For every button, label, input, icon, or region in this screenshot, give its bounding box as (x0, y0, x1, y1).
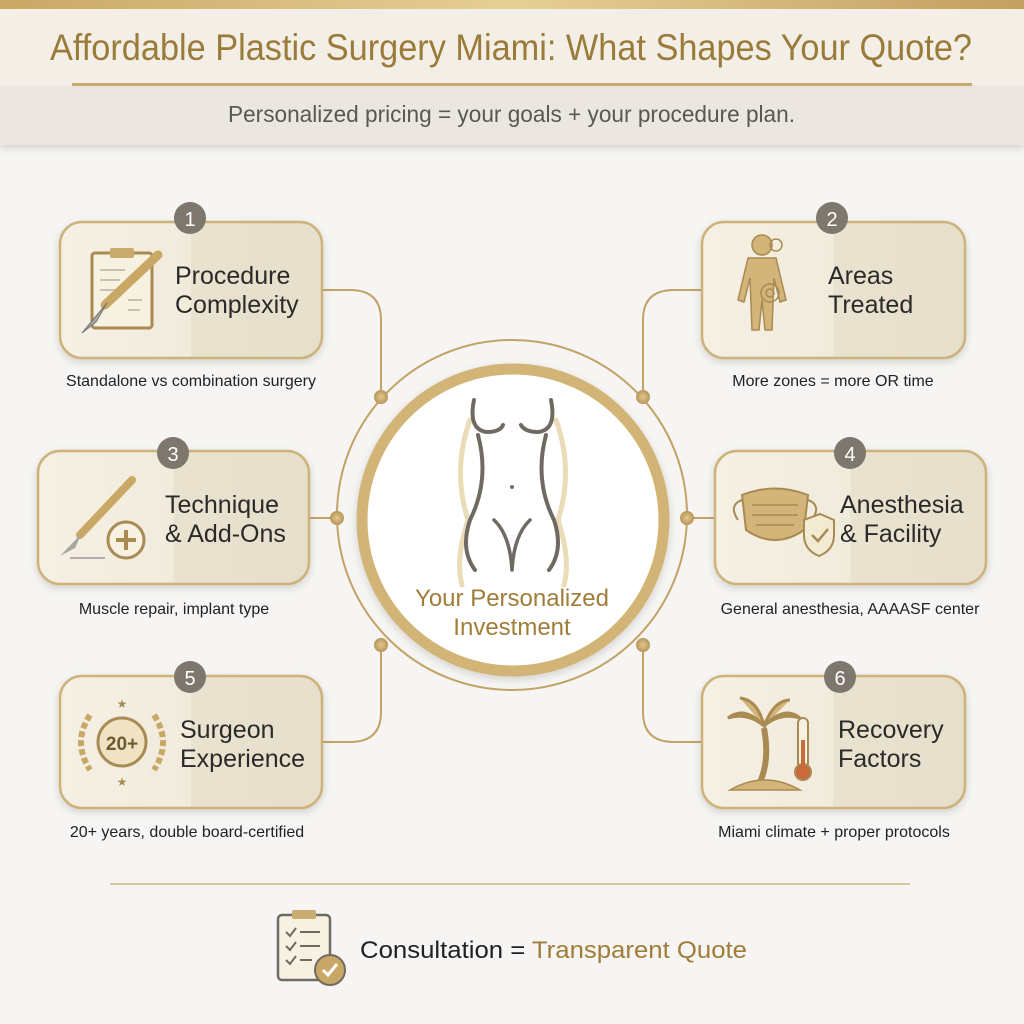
panel 3 (38, 437, 309, 584)
panel 4 (715, 437, 986, 584)
panel 4: 4 (844, 444, 856, 466)
icon: laurel 20+: ★ (117, 697, 127, 711)
center circle: Your Personalized (415, 585, 609, 612)
panel 4: Anesthesia (840, 491, 964, 519)
panel 5: 5 (184, 668, 196, 690)
icon: clipboard scalpel (82, 248, 158, 333)
panel 4: & Facility (840, 520, 942, 548)
center circle: Investment (453, 614, 571, 641)
subtitle: Personalized pricing = your goals + your procedure plan. (228, 101, 795, 127)
panel 6: 6 (834, 668, 846, 690)
panel 5 (60, 661, 322, 808)
icon: mask shield (734, 488, 834, 556)
panel 6: Factors (838, 745, 921, 773)
caption 1: Standalone vs combination surgery (66, 373, 316, 390)
panel 1: Complexity (175, 291, 299, 319)
panel 3: Technique (165, 491, 279, 519)
panel 3: 3 (167, 444, 179, 466)
panel 2 (702, 202, 965, 358)
callout: consultation: Consultation = Transparent Quote (360, 937, 747, 964)
panel 5: Experience (180, 745, 305, 773)
icon: laurel 20+: 20+ (106, 734, 138, 755)
icon: clipboard check (278, 910, 345, 985)
panel 6 (702, 661, 965, 808)
panel 3: & Add-Ons (165, 520, 286, 548)
panel 1 (60, 202, 322, 358)
caption 3: Muscle repair, implant type (79, 601, 269, 618)
panel 5: Surgeon (180, 716, 275, 744)
caption 2: More zones = more OR time (732, 373, 934, 390)
icon: laurel 20+ (81, 697, 163, 789)
caption 4: General anesthesia, AAAASF center (721, 601, 980, 618)
panel 6: Recovery (838, 716, 944, 744)
icon: torso (460, 400, 566, 585)
panel 1: 1 (184, 209, 196, 231)
panel 2: Treated (828, 291, 913, 319)
panel 1: Procedure (175, 262, 290, 290)
icon: laurel 20+: ★ (117, 775, 127, 789)
center circle (362, 369, 664, 671)
icon: body (738, 235, 786, 330)
icon: scalpel plus (60, 480, 144, 558)
caption 6: Miami climate + proper protocols (718, 824, 950, 841)
connectors (309, 290, 715, 742)
icon: palm thermometer (728, 698, 811, 790)
panel 2: 2 (826, 209, 838, 231)
panel 2: Areas (828, 262, 893, 290)
caption 5: 20+ years, double board-certified (70, 824, 304, 841)
header (0, 0, 1024, 145)
title: Affordable Plastic Surgery Miami: What Shapes Your Quote? (50, 27, 972, 68)
